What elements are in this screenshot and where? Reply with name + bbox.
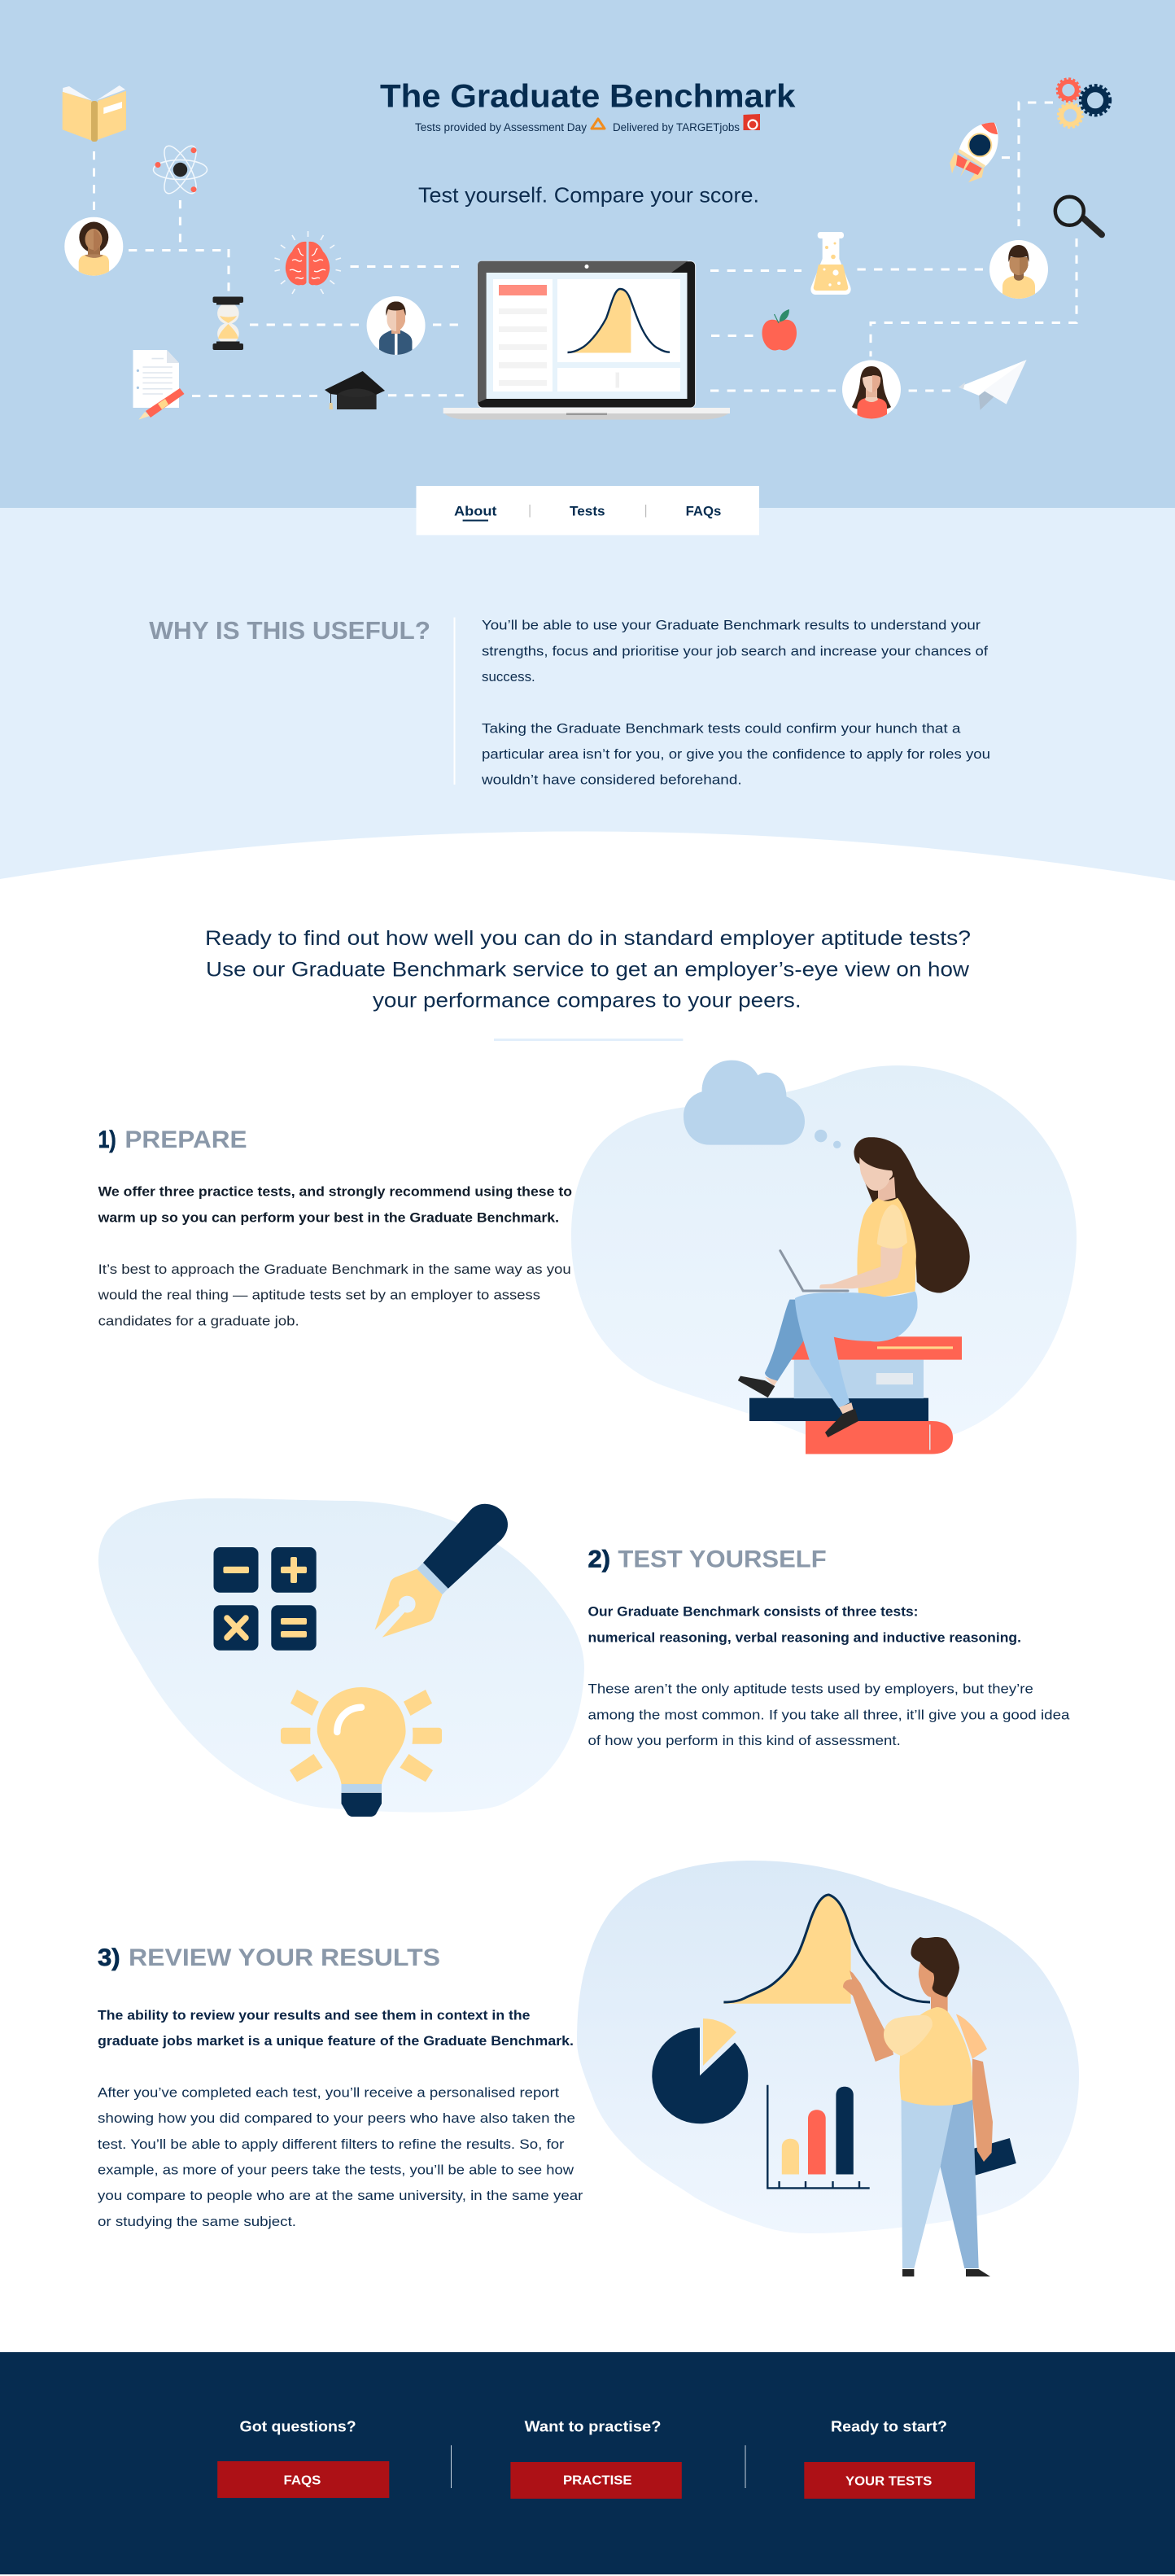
pen nib [375,1504,508,1638]
text block [588,1605,1070,1748]
stack of books [749,1336,962,1454]
text block: example, as more of your peers take the tests, you’ll be able to see how [98,2163,574,2178]
icon: document and pen [133,350,184,420]
illustration: woman on books [571,1061,1077,1454]
cta: your tests: YOUR TESTS [845,2474,933,2488]
panel: call to action footer [0,2352,1175,2574]
icon: brain [275,231,341,294]
body text: success. [482,670,535,684]
body text: strengths, focus and prioritise your job search and increase your chances of [482,644,988,658]
text block: showing how you did compared to your peers who have also taken the [98,2111,575,2126]
intro statement [205,927,971,1012]
heading: 2) [588,1546,610,1572]
subtitle with provider logos: Tests provided by Assessment Day [415,121,587,133]
intro statement: Use our Graduate Benchmark service to get an employer’s-eye view on how [206,958,970,981]
heading: TEST YOURSELF [618,1546,827,1572]
illustration: maths, pen and bulb [98,1498,584,1817]
text block: among the most common. If you take all three, it’ll give you a good idea [588,1708,1070,1722]
panel: step 3 review your results [98,1861,1079,2276]
body text: particular area isn’t for you, or give you the confidence to apply for roles you [482,747,990,762]
body text: You’ll be able to use your Graduate Benchmark results to understand your [482,619,981,633]
panel: step 2 test yourself [98,1498,1070,1817]
heading: 1) [98,1126,116,1153]
text block: of how you perform in this kind of assessment. [588,1734,901,1748]
text block: or studying the same subject. [98,2215,296,2229]
text block [97,1185,572,1328]
text block: would the real thing — aptitude tests set by an employer to assess [97,1288,540,1303]
panel: why is this useful [0,508,1175,895]
icon: graduation cap [325,371,385,409]
cta: your tests [804,2418,975,2499]
calculator keys [213,1547,317,1651]
text block: warm up so you can perform your best in the Graduate Benchmark. [98,1210,559,1225]
icon: open book [63,85,126,142]
cta: practise [510,2418,682,2499]
title: The Graduate Benchmark [380,78,796,114]
panel: hero header [0,0,1175,508]
icon: avatar man yellow shirt [989,240,1048,300]
icon: TARGETjobs logo [744,114,760,130]
connector dashes [94,103,1077,396]
icon: Assessment Day logo [592,119,605,129]
heading: PREPARE [124,1126,247,1153]
cta: faqs: FAQS [283,2473,321,2487]
navigation tabs: Tests [570,504,605,518]
cta: practise: PRACTISE [563,2473,632,2487]
screen side panel [493,279,553,391]
icon: paper plane [959,360,1027,410]
icon: gears [1057,79,1110,128]
icon: rocket [950,123,998,182]
thought cloud [684,1061,841,1148]
panel: step 1 prepare [97,1061,1077,1454]
heading: REVIEW YOUR RESULTS [129,1944,440,1971]
woman figure [738,1137,970,1437]
cta: practise: Want to practise? [525,2418,661,2434]
icon: laptop [443,261,730,420]
subtitle with provider logos: Delivered by TARGETjobs [613,121,740,133]
icon: avatar woman red top [842,360,901,420]
text block: It’s best to approach the Graduate Benchmark in the same way as you [98,1262,571,1277]
body text [481,619,990,788]
blob background [571,1065,1077,1435]
navigation tabs: About [454,504,497,518]
icon: flask [810,232,851,295]
icon: apple [762,309,797,350]
subtitle with provider logos [415,114,760,133]
text block: candidates for a graduate job. [98,1314,299,1328]
heading: 3) [98,1944,120,1971]
tagline: Test yourself. Compare your score. [418,182,759,207]
icon: avatar man jacket [367,296,426,355]
cta: faqs: Got questions? [239,2418,356,2434]
text block: test. You’ll be able to apply different filters to refine the results. So, for [98,2137,565,2152]
illustration: man with charts [577,1861,1079,2276]
white curved section edge [0,831,1175,895]
text block: graduate jobs market is a unique feature of the Graduate Benchmark. [98,2034,574,2049]
icon: hourglass [213,296,243,350]
text block: you compare to people who are at the same university, in the same year [98,2189,583,2203]
text block [98,2008,583,2229]
body text: Taking the Graduate Benchmark tests could confirm your hunch that a [482,721,961,736]
blob background [577,1861,1079,2233]
pie chart [652,2018,748,2123]
text block: These aren’t the only aptitude tests used by employers, but they’re [588,1682,1033,1697]
bar chart [767,2085,870,2188]
icon: atom [153,142,207,198]
standing man figure [843,1937,1016,2276]
text block: The ability to review your results and see them in context in the [98,2008,530,2023]
light bulb [281,1687,442,1817]
text block: Our Graduate Benchmark consists of three tests: [588,1605,918,1620]
bell curve chart [723,1895,930,2004]
body text: wouldn’t have considered beforehand. [481,773,742,788]
cta: your tests: Ready to start? [831,2418,947,2434]
intro statement: Ready to find out how well you can do in standard employer aptitude tests? [205,927,971,950]
icon: avatar woman dark hair [64,217,123,276]
navigation tabs [417,486,759,535]
blob background [98,1498,584,1813]
text block: After you’ve completed each test, you’ll receive a personalised report [98,2085,559,2100]
heading: WHY IS THIS USEFUL? [149,616,430,645]
navigation tabs: FAQs [686,504,721,518]
icon: magnifying glass [1055,197,1102,234]
cta: faqs [217,2418,389,2498]
screen bell curve [568,289,670,353]
intro statement: your performance compares to your peers. [373,990,802,1012]
text block: We offer three practice tests, and strongly recommend using these to [98,1185,572,1200]
text block: numerical reasoning, verbal reasoning and inductive reasoning. [588,1630,1021,1645]
